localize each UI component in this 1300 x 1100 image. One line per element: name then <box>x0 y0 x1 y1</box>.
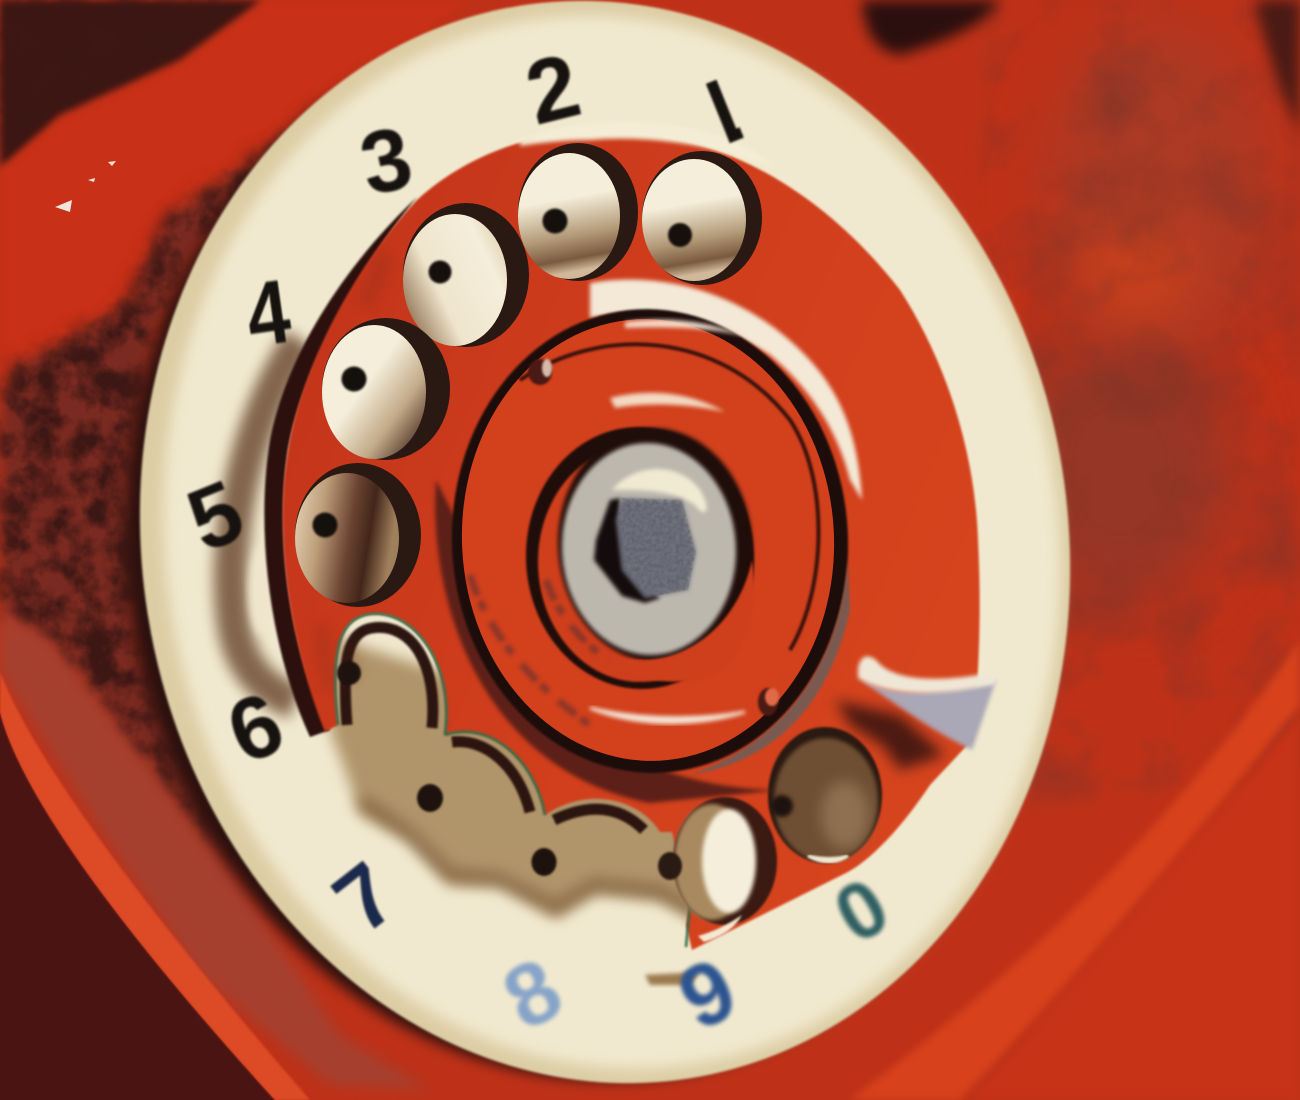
finger stop <box>858 656 996 750</box>
darker lower edge of shadow <box>360 800 700 915</box>
top edge highlight on plate <box>625 320 745 336</box>
bright paint band top-left <box>0 0 470 400</box>
numeral 8: 8 <box>487 938 577 1049</box>
hub stud top-left <box>528 359 552 385</box>
lower left dark recess <box>0 712 275 1100</box>
numeral 5: 5 <box>174 460 256 571</box>
wheel tip reflection <box>698 915 742 942</box>
numeral 4: 4 <box>240 260 296 366</box>
finger hole 0 <box>768 727 882 863</box>
hub stud lower-right <box>758 688 779 716</box>
hub dark outer ring <box>440 299 860 783</box>
lower left ridge <box>0 672 310 1100</box>
wear specks on wheel <box>320 258 385 690</box>
inner dark ring <box>519 421 761 695</box>
numeral 0: 0 <box>820 861 903 960</box>
dark top-left corner <box>0 0 262 168</box>
numeral 1: 1 <box>678 58 762 169</box>
lower right ridge <box>850 640 1300 1100</box>
dark shadow under finger stop <box>835 700 945 770</box>
dark top-right corner <box>1255 0 1300 135</box>
wheel left rim <box>264 197 417 737</box>
cream patch in left shadow <box>249 545 275 635</box>
wheel face <box>283 133 980 950</box>
bottom highlight on plate <box>590 708 745 723</box>
pink worn zone above ridge <box>0 610 430 1090</box>
finger hole 4 <box>322 318 450 460</box>
grey centre disc <box>557 439 741 659</box>
finger hole 3 <box>403 203 529 347</box>
lower right metal reflection on ring <box>690 560 850 775</box>
lower right panel <box>970 715 1300 1100</box>
hub outer plate <box>451 310 845 770</box>
numeral 3: 3 <box>352 107 420 214</box>
finger hole 2 <box>518 143 638 281</box>
numeral 2: 2 <box>517 35 589 145</box>
streak near nine <box>645 972 700 985</box>
inner dark crescent top-right <box>552 423 758 667</box>
finger hole 1 <box>642 151 762 285</box>
dark shadow at top edge <box>862 0 1000 55</box>
numeral 7: 7 <box>316 843 415 951</box>
finger hole 9 <box>673 797 777 925</box>
left scallop walls <box>345 627 644 830</box>
numeral 9: 9 <box>664 938 750 1049</box>
shadow cast by wheel below <box>330 640 720 922</box>
paint chips <box>55 161 116 212</box>
hex nut <box>594 498 696 603</box>
numeral 6: 6 <box>214 672 296 783</box>
rust patch left <box>0 105 330 880</box>
dial numerals <box>174 35 903 1049</box>
inner orange ring <box>532 441 744 687</box>
dots for open finger slots <box>337 661 682 880</box>
cream collar reflection <box>590 279 862 500</box>
disc highlight above nut <box>612 469 707 512</box>
wheel edge reflection top <box>520 122 780 170</box>
finger hole 5 <box>295 463 421 607</box>
green paint along scallops <box>335 614 690 947</box>
inner top highlight <box>610 393 725 412</box>
hub recess band lower-left <box>435 480 780 803</box>
lower ring orange overlay <box>545 560 754 682</box>
hub second groove arc <box>520 344 819 650</box>
rust on hub <box>470 575 610 725</box>
rotary finger wheel <box>264 122 980 950</box>
shadow cast by wheel on left of ring <box>231 340 300 702</box>
